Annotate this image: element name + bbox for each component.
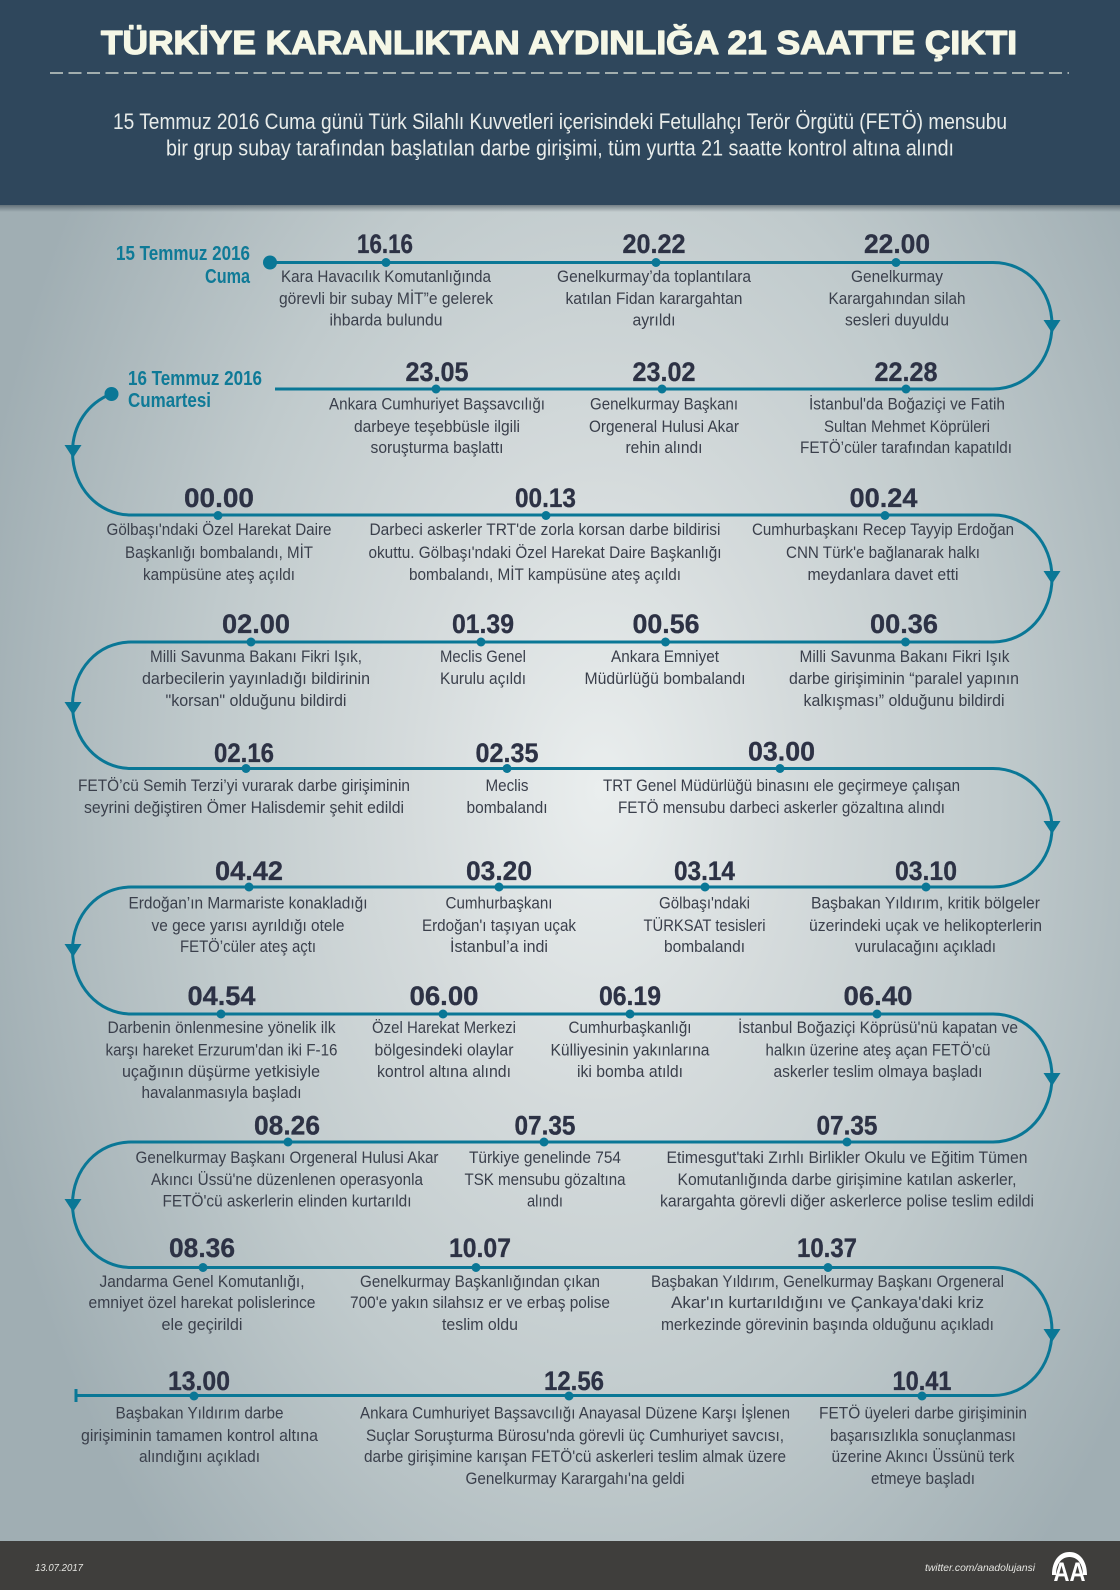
arrow (1044, 821, 1060, 834)
event 00.00: kampüsüne ateş açıldı (143, 565, 295, 584)
event 10.07: 10.07 (449, 1233, 511, 1263)
event 13.00: Başbakan Yıldırım darbe (116, 1404, 284, 1422)
event 23.02: 23.02 (632, 357, 696, 387)
event 22.28: FETÖ’cüler tarafından kapatıldı (800, 438, 1012, 457)
event 10.07: 700'e yakın silahsız er ve erbaş polise (350, 1293, 610, 1312)
event 02.35 (466, 738, 548, 817)
event 02.16: 02.16 (214, 738, 274, 768)
event 04.54: Darbenin önlenmesine yönelik ilk (108, 1018, 336, 1037)
event 23.05: 23.05 (406, 357, 468, 387)
event 03.20: Erdoğan'ı taşıyan uçak (422, 916, 576, 935)
event 20.22: 20.22 (622, 229, 686, 259)
event 08.26: FETÖ'cü askerlerin elinden kurtarıldı (162, 1192, 412, 1210)
event 06.40: 06.40 (844, 981, 912, 1011)
event 23.02 (589, 357, 739, 457)
event 04.54: uçağının düşürme yetkisiyle (122, 1062, 320, 1081)
event 03.14 (644, 856, 766, 956)
event 01.39: Kurulu açıldı (440, 669, 526, 688)
event 00.24: Cumhurbaşkanı Recep Tayyip Erdoğan (752, 520, 1014, 539)
event 10.07: Genelkurmay Başkanlığından çıkan (360, 1272, 600, 1291)
event 16.16: ihbarda bulundu (330, 310, 442, 330)
footer credit: twitter.com/anadolujansi (925, 1562, 1036, 1574)
event 10.37 (651, 1233, 1004, 1334)
event 08.26: Genelkurmay Başkanı Orgeneral Hulusi Akar (136, 1148, 439, 1167)
event 12.56: Ankara Cumhuriyet Başsavcılığı Anayasal Düzene Karşı İşlenen (360, 1404, 790, 1422)
event 02.00 (142, 609, 370, 710)
event 06.40 (738, 981, 1018, 1081)
event 07.35 right: karargahta görevli diğer askerlerce polise teslim edildi (660, 1192, 1034, 1210)
arrow (64, 445, 82, 458)
event 07.35 center: alındı (527, 1192, 563, 1210)
event 06.19: Cumhurbaşkanlığı (568, 1018, 692, 1037)
arrow (64, 944, 82, 957)
event 12.56 (360, 1366, 790, 1488)
event 03.10: vurulacağını açıkladı (855, 937, 996, 956)
event 04.42 (128, 856, 368, 956)
event 00.36: kalkışması” olduğunu bildirdi (804, 691, 1004, 710)
timeline end tick (74, 1389, 78, 1402)
event 13.00: girişiminin tamamen kontrol altına (81, 1426, 319, 1445)
event 03.10: Başbakan Yıldırım, kritik bölgeler (811, 894, 1040, 912)
event 22.00 (828, 229, 966, 330)
event 10.41: başarısızlıkla sonuçlanması (830, 1426, 1016, 1445)
event 08.36: ele geçirildi (162, 1315, 242, 1334)
event 20.22: Genelkurmay’da toplantılara (557, 267, 751, 286)
event 10.41: etmeye başladı (871, 1469, 975, 1488)
arrow (1044, 571, 1060, 584)
event 04.42: ve gece yarısı ayrıldığı otele (152, 916, 344, 935)
event 16.16: Kara Havacılık Komutanlığında (281, 267, 491, 286)
event 03.14: Gölbaşı'ndaki (659, 894, 750, 912)
event 23.05: darbeye teşebbüsle ilgili (354, 417, 520, 436)
event 07.35 center: TSK mensubu gözaltına (464, 1170, 626, 1189)
event 03.20: İstanbul’a indi (450, 937, 548, 956)
event 12.56: darbe girişimine karışan FETÖ'cü askerleri teslim almak üzere (364, 1447, 786, 1466)
event 00.56: Müdürlüğü bombalandı (584, 669, 746, 688)
event 10.07: teslim oldu (442, 1315, 518, 1334)
event 13.00: 13.00 (168, 1366, 230, 1396)
event 07.35 right: Komutanlığında darbe girişimine katılan askerler, (678, 1170, 1016, 1189)
event 03.10: 03.10 (895, 856, 957, 886)
event 08.36: emniyet özel harekat polislerince (88, 1293, 316, 1312)
event 07.35 center: 07.35 (514, 1110, 576, 1140)
event 00.36: Milli Savunma Bakanı Fikri Işık (800, 647, 1010, 666)
event 03.00 (603, 736, 960, 817)
event 10.41: 10.41 (892, 1366, 952, 1396)
event 06.00: Özel Harekat Merkezi (372, 1018, 516, 1037)
event 03.10: üzerindeki uçak ve helikopterlerin (809, 916, 1042, 935)
start dot: 16 July (104, 387, 118, 401)
intro text (113, 109, 1007, 160)
event 00.00: 00.00 (184, 483, 254, 513)
footer date: 13.07.2017 (35, 1562, 84, 1574)
event 23.05: Ankara Cumhuriyet Başsavcılığı (329, 394, 545, 414)
event 00.00: Gölbaşı'ndaki Özel Harekat Daire (106, 520, 332, 539)
event 12.56: 12.56 (544, 1366, 604, 1396)
event 22.00: sesleri duyuldu (845, 310, 949, 330)
panel: footer (0, 1541, 1120, 1590)
event 03.14: 03.14 (674, 856, 735, 886)
event 16.16 (279, 229, 493, 330)
event 02.00: 02.00 (222, 609, 290, 639)
event 07.35 right: 07.35 (816, 1110, 878, 1140)
event 00.24: CNN Türk'e bağlanarak halkı (786, 543, 980, 562)
event 10.07 (350, 1233, 610, 1334)
event 00.24: 00.24 (850, 483, 918, 513)
event 01.39: Meclis Genel (440, 647, 526, 666)
date label: 16 Temmuz 2016 Cumartesi (128, 367, 262, 412)
event 00.36: 00.36 (870, 609, 938, 639)
event 20.22 (557, 229, 751, 330)
event 06.00: kontrol altına alındı (377, 1062, 511, 1081)
event 12.56: Suçlar Soruşturma Bürosu'nda görevli üç Cumhuriyet savcısı, (366, 1426, 784, 1445)
event 02.00: darbecilerin yayınladığı bildirinin (142, 669, 370, 688)
event 23.05 (329, 357, 545, 457)
arrow (1044, 320, 1060, 333)
event 07.35 right (660, 1110, 1034, 1210)
event 03.14: bombalandı (664, 937, 745, 956)
event 08.26 (136, 1110, 439, 1210)
event 02.35: Meclis (486, 776, 528, 795)
arrow (1044, 1329, 1060, 1342)
event 03.00: TRT Genel Müdürlüğü binasını ele geçirmeye çalışan (603, 776, 960, 795)
event 00.00 (106, 483, 332, 584)
event 10.37: Başbakan Yıldırım, Genelkurmay Başkanı Orgeneral (651, 1272, 1004, 1291)
arrow (64, 702, 82, 715)
arrow (1044, 1073, 1060, 1086)
event 10.37: Akar'ın kurtarıldığını ve Çankaya'daki kriz (671, 1293, 984, 1312)
event 06.00 (372, 981, 516, 1081)
event 06.19: 06.19 (599, 981, 661, 1011)
event 06.19 (550, 981, 710, 1081)
event 02.16 (78, 738, 410, 817)
event 00.56 (584, 609, 746, 688)
event 07.35 right: Etimesgut'taki Zırhlı Birlikler Okulu ve Eğitim Tümen (666, 1148, 1028, 1167)
date label: 15 Temmuz 2016 Cuma: Cuma (205, 265, 250, 288)
event 08.36: Jandarma Genel Komutanlığı, (100, 1272, 304, 1291)
event 22.28: 22.28 (874, 357, 938, 387)
event 10.41: üzerine Akıncı Üssünü terk (832, 1447, 1015, 1466)
event 10.37: merkezinde görevinin başında olduğunu açıkladı (661, 1315, 994, 1334)
event 08.36 (88, 1233, 316, 1334)
event 16.16: görevli bir subay MİT”e gelerek (279, 289, 493, 308)
event 22.28: İstanbul'da Boğaziçi ve Fatih (809, 394, 1005, 414)
event 23.02: Genelkurmay Başkanı (590, 394, 738, 414)
event 00.13 (368, 483, 722, 584)
event 06.40: halkın üzerine ateş açan FETÖ'cü (766, 1040, 990, 1060)
event 20.22: ayrıldı (632, 310, 676, 330)
event 13.00: alındığını açıkladı (139, 1447, 260, 1466)
event 03.00: FETÖ mensubu darbeci askerler gözaltına alındı (618, 798, 945, 817)
title: TÜRKİYE KARANLIKTAN AYDINLIĞA 21 SAATTE ÇIKTI (101, 24, 1017, 61)
panel: header (0, 0, 1120, 205)
event 03.20 (422, 856, 576, 956)
event 00.00: Başkanlığı bombalandı, MİT (125, 543, 313, 562)
event 23.02: Orgeneral Hulusi Akar (589, 417, 739, 436)
event 20.22: katılan Fidan karargahtan (566, 289, 742, 308)
event 06.40: askerler teslim olmaya başladı (774, 1062, 982, 1081)
event 06.00: bölgesindeki olaylar (374, 1040, 514, 1060)
timeline path (270, 262, 1052, 389)
date label: 15 Temmuz 2016 Cuma (116, 242, 250, 288)
date label: 16 Temmuz 2016 Cumartesi: Cumartesi (128, 389, 211, 412)
event 00.36: darbe girişiminin “paralel yapının (789, 669, 1019, 688)
event 04.54: havalanmasıyla başladı (142, 1083, 302, 1102)
event 00.24 (752, 483, 1014, 584)
intro text: 15 Temmuz 2016 Cuma günü Türk Silahlı Kuvvetleri içerisindeki Fetullahçı Terör Örgütü (FETÖ) mensubu (113, 109, 1007, 134)
event 08.26: Akıncı Üssü'ne düzenlenen operasyonla (151, 1170, 423, 1189)
intro text: bir grup subay tarafından başlatılan darbe girişimi, tüm yurtta 21 saatte kontrol altına alındı (166, 136, 954, 160)
event 22.00: Karargahından silah (828, 289, 966, 308)
event 02.35: bombalandı (466, 798, 548, 817)
event 00.13: bombalandı, MİT kampüsüne ateş açıldı (409, 565, 681, 584)
event 22.28: Sultan Mehmet Köprüleri (824, 417, 990, 436)
event 03.20: 03.20 (466, 856, 532, 886)
event 10.37: 10.37 (797, 1233, 857, 1263)
timeline path continued (72, 394, 1052, 1396)
event 22.00: Genelkurmay (851, 267, 943, 286)
event 04.54: 04.54 (188, 981, 256, 1011)
event 13.00 (81, 1366, 319, 1466)
event 04.54: karşı hareket Erzurum'dan iki F-16 (106, 1040, 338, 1060)
event 06.00: 06.00 (410, 981, 478, 1011)
icon: agency logo: AA (1054, 1557, 1086, 1587)
event 08.36: 08.36 (169, 1233, 235, 1263)
event 01.39 (440, 609, 526, 688)
date label: 15 Temmuz 2016 Cuma: 15 Temmuz 2016 (116, 242, 250, 265)
event 07.35 center (464, 1110, 626, 1210)
event 00.13: Darbeci askerler TRT'de zorla korsan darbe bildirisi (370, 520, 720, 539)
event 00.13: okuttu. Gölbaşı'ndaki Özel Harekat Daire Başkanlığı (368, 543, 722, 562)
start dot: 15 July (263, 256, 277, 270)
event 23.05: soruşturma başlattı (370, 438, 504, 457)
event 04.42: 04.42 (215, 856, 283, 886)
event 03.10 (809, 856, 1042, 956)
event 02.16: seyrini değiştiren Ömer Halisdemir şehit edildi (84, 798, 404, 817)
event 06.40: İstanbul Boğaziçi Köprüsü'nü kapatan ve (738, 1018, 1018, 1037)
event 00.56: Ankara Emniyet (611, 647, 719, 666)
event 02.00: "korsan" olduğunu bildirdi (166, 691, 346, 710)
event 04.42: FETÖ’cüler ateş açtı (180, 937, 316, 956)
event 16.16: 16.16 (357, 229, 413, 259)
event 00.13: 00.13 (515, 483, 576, 513)
event 07.35 center: Türkiye genelinde 754 (469, 1148, 621, 1167)
event 03.20: Cumhurbaşkanı (446, 894, 552, 912)
event 03.00: 03.00 (748, 736, 815, 766)
event 02.35: 02.35 (476, 738, 538, 768)
event 10.41: FETÖ üyeleri darbe girişiminin (819, 1404, 1027, 1422)
event 03.14: TÜRKSAT tesisleri (644, 916, 766, 935)
event 23.02: rehin alındı (626, 438, 702, 457)
event 10.41 (819, 1366, 1027, 1488)
date label: 16 Temmuz 2016 Cumartesi: 16 Temmuz 2016 (128, 367, 262, 390)
event 04.54 (106, 981, 338, 1102)
event 22.00: 22.00 (864, 229, 930, 259)
event 06.19: iki bomba atıldı (577, 1062, 683, 1081)
event 06.19: Külliyesinin yakınlarına (550, 1040, 710, 1060)
event 01.39: 01.39 (452, 609, 514, 639)
arrow (64, 1199, 82, 1212)
event 02.16: FETÖ’cü Semih Terzi’yi vurarak darbe girişiminin (78, 776, 410, 795)
event 00.36 (789, 609, 1019, 710)
event 08.26: 08.26 (254, 1110, 320, 1140)
event 00.56: 00.56 (632, 609, 700, 639)
event 12.56: Genelkurmay Karargahı'na geldi (466, 1469, 684, 1488)
event 00.24: meydanlara davet etti (808, 565, 958, 584)
event 04.42: Erdoğan’ın Marmariste konakladığı (128, 894, 368, 912)
event 22.28 (800, 357, 1012, 457)
event 02.00: Milli Savunma Bakanı Fikri Işık, (150, 647, 362, 666)
